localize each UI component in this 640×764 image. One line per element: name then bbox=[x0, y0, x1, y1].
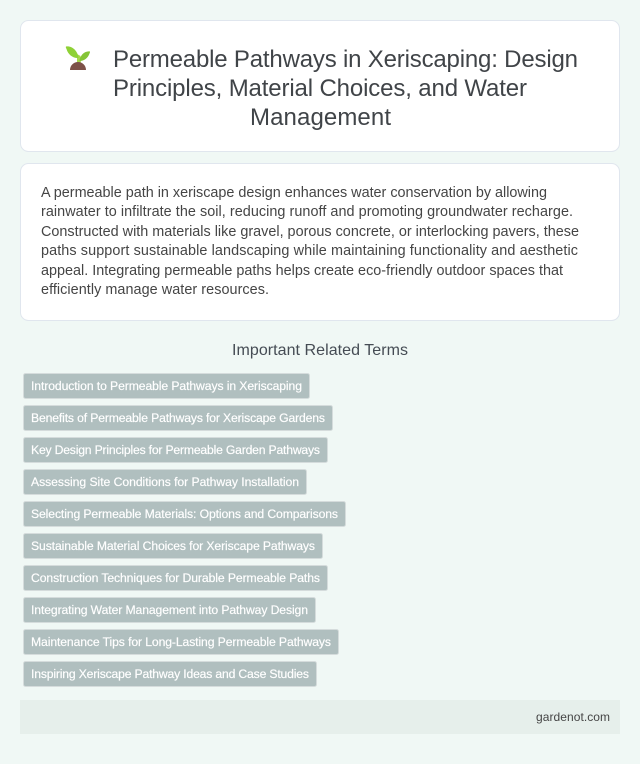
title: Principles, Material Choices, and Water bbox=[113, 75, 527, 102]
chip 5 bbox=[24, 502, 346, 526]
panel: description bbox=[20, 164, 620, 320]
description text: rainwater to infiltrate the soil, reducing runoff and promoting groundwater recharge. bbox=[41, 204, 573, 220]
panel: title card bbox=[20, 20, 620, 152]
chip 6: Sustainable Material Choices for Xeriscape Pathways bbox=[31, 539, 315, 553]
footer bbox=[20, 700, 620, 734]
description text: Constructed with materials like gravel, porous concrete, or interlocking pavers, these bbox=[41, 224, 579, 240]
chip 5: Selecting Permeable Materials: Options and Comparisons bbox=[31, 507, 338, 521]
chip 10: Inspiring Xeriscape Pathway Ideas and Case Studies bbox=[31, 667, 309, 681]
chip 8 bbox=[24, 598, 316, 622]
description text: appeal. Integrating permeable paths helps create eco-friendly outdoor spaces that bbox=[41, 263, 563, 279]
description text: A permeable path in xeriscape design enhances water conservation by allowing bbox=[41, 185, 547, 201]
description text: efficiently manage water resources. bbox=[41, 282, 269, 298]
chip 3 bbox=[24, 438, 328, 462]
chip 4: Assessing Site Conditions for Pathway Installation bbox=[31, 475, 299, 489]
title: Permeable Pathways in Xeriscaping: Design bbox=[113, 46, 578, 73]
chip 7 bbox=[24, 566, 328, 590]
title bbox=[113, 46, 578, 131]
chip 7: Construction Techniques for Durable Permeable Paths bbox=[31, 571, 320, 585]
chip 2: Benefits of Permeable Pathways for Xeriscape Gardens bbox=[31, 411, 325, 425]
chip 1 bbox=[24, 374, 310, 398]
chip 6 bbox=[24, 534, 322, 558]
chip 3: Key Design Principles for Permeable Garden Pathways bbox=[31, 443, 320, 457]
heading: related terms: Important Related Terms bbox=[232, 342, 408, 359]
chip 9: Maintenance Tips for Long-Lasting Permeable Pathways bbox=[31, 635, 331, 649]
list: related term chips bbox=[24, 374, 346, 686]
icon: seedling bbox=[66, 46, 90, 70]
chip 8: Integrating Water Management into Pathway Design bbox=[31, 603, 308, 617]
chip 2 bbox=[24, 406, 332, 430]
footer text: gardenot.com bbox=[536, 710, 610, 724]
chip 10 bbox=[24, 662, 316, 686]
description text: paths support sustainable landscaping while maintaining functionality and aesthetic bbox=[41, 243, 578, 259]
chip 1: Introduction to Permeable Pathways in Xeriscaping bbox=[31, 379, 302, 393]
description text bbox=[41, 185, 579, 298]
chip 9 bbox=[24, 630, 338, 654]
title: Management bbox=[250, 104, 391, 131]
chip 4 bbox=[24, 470, 306, 494]
